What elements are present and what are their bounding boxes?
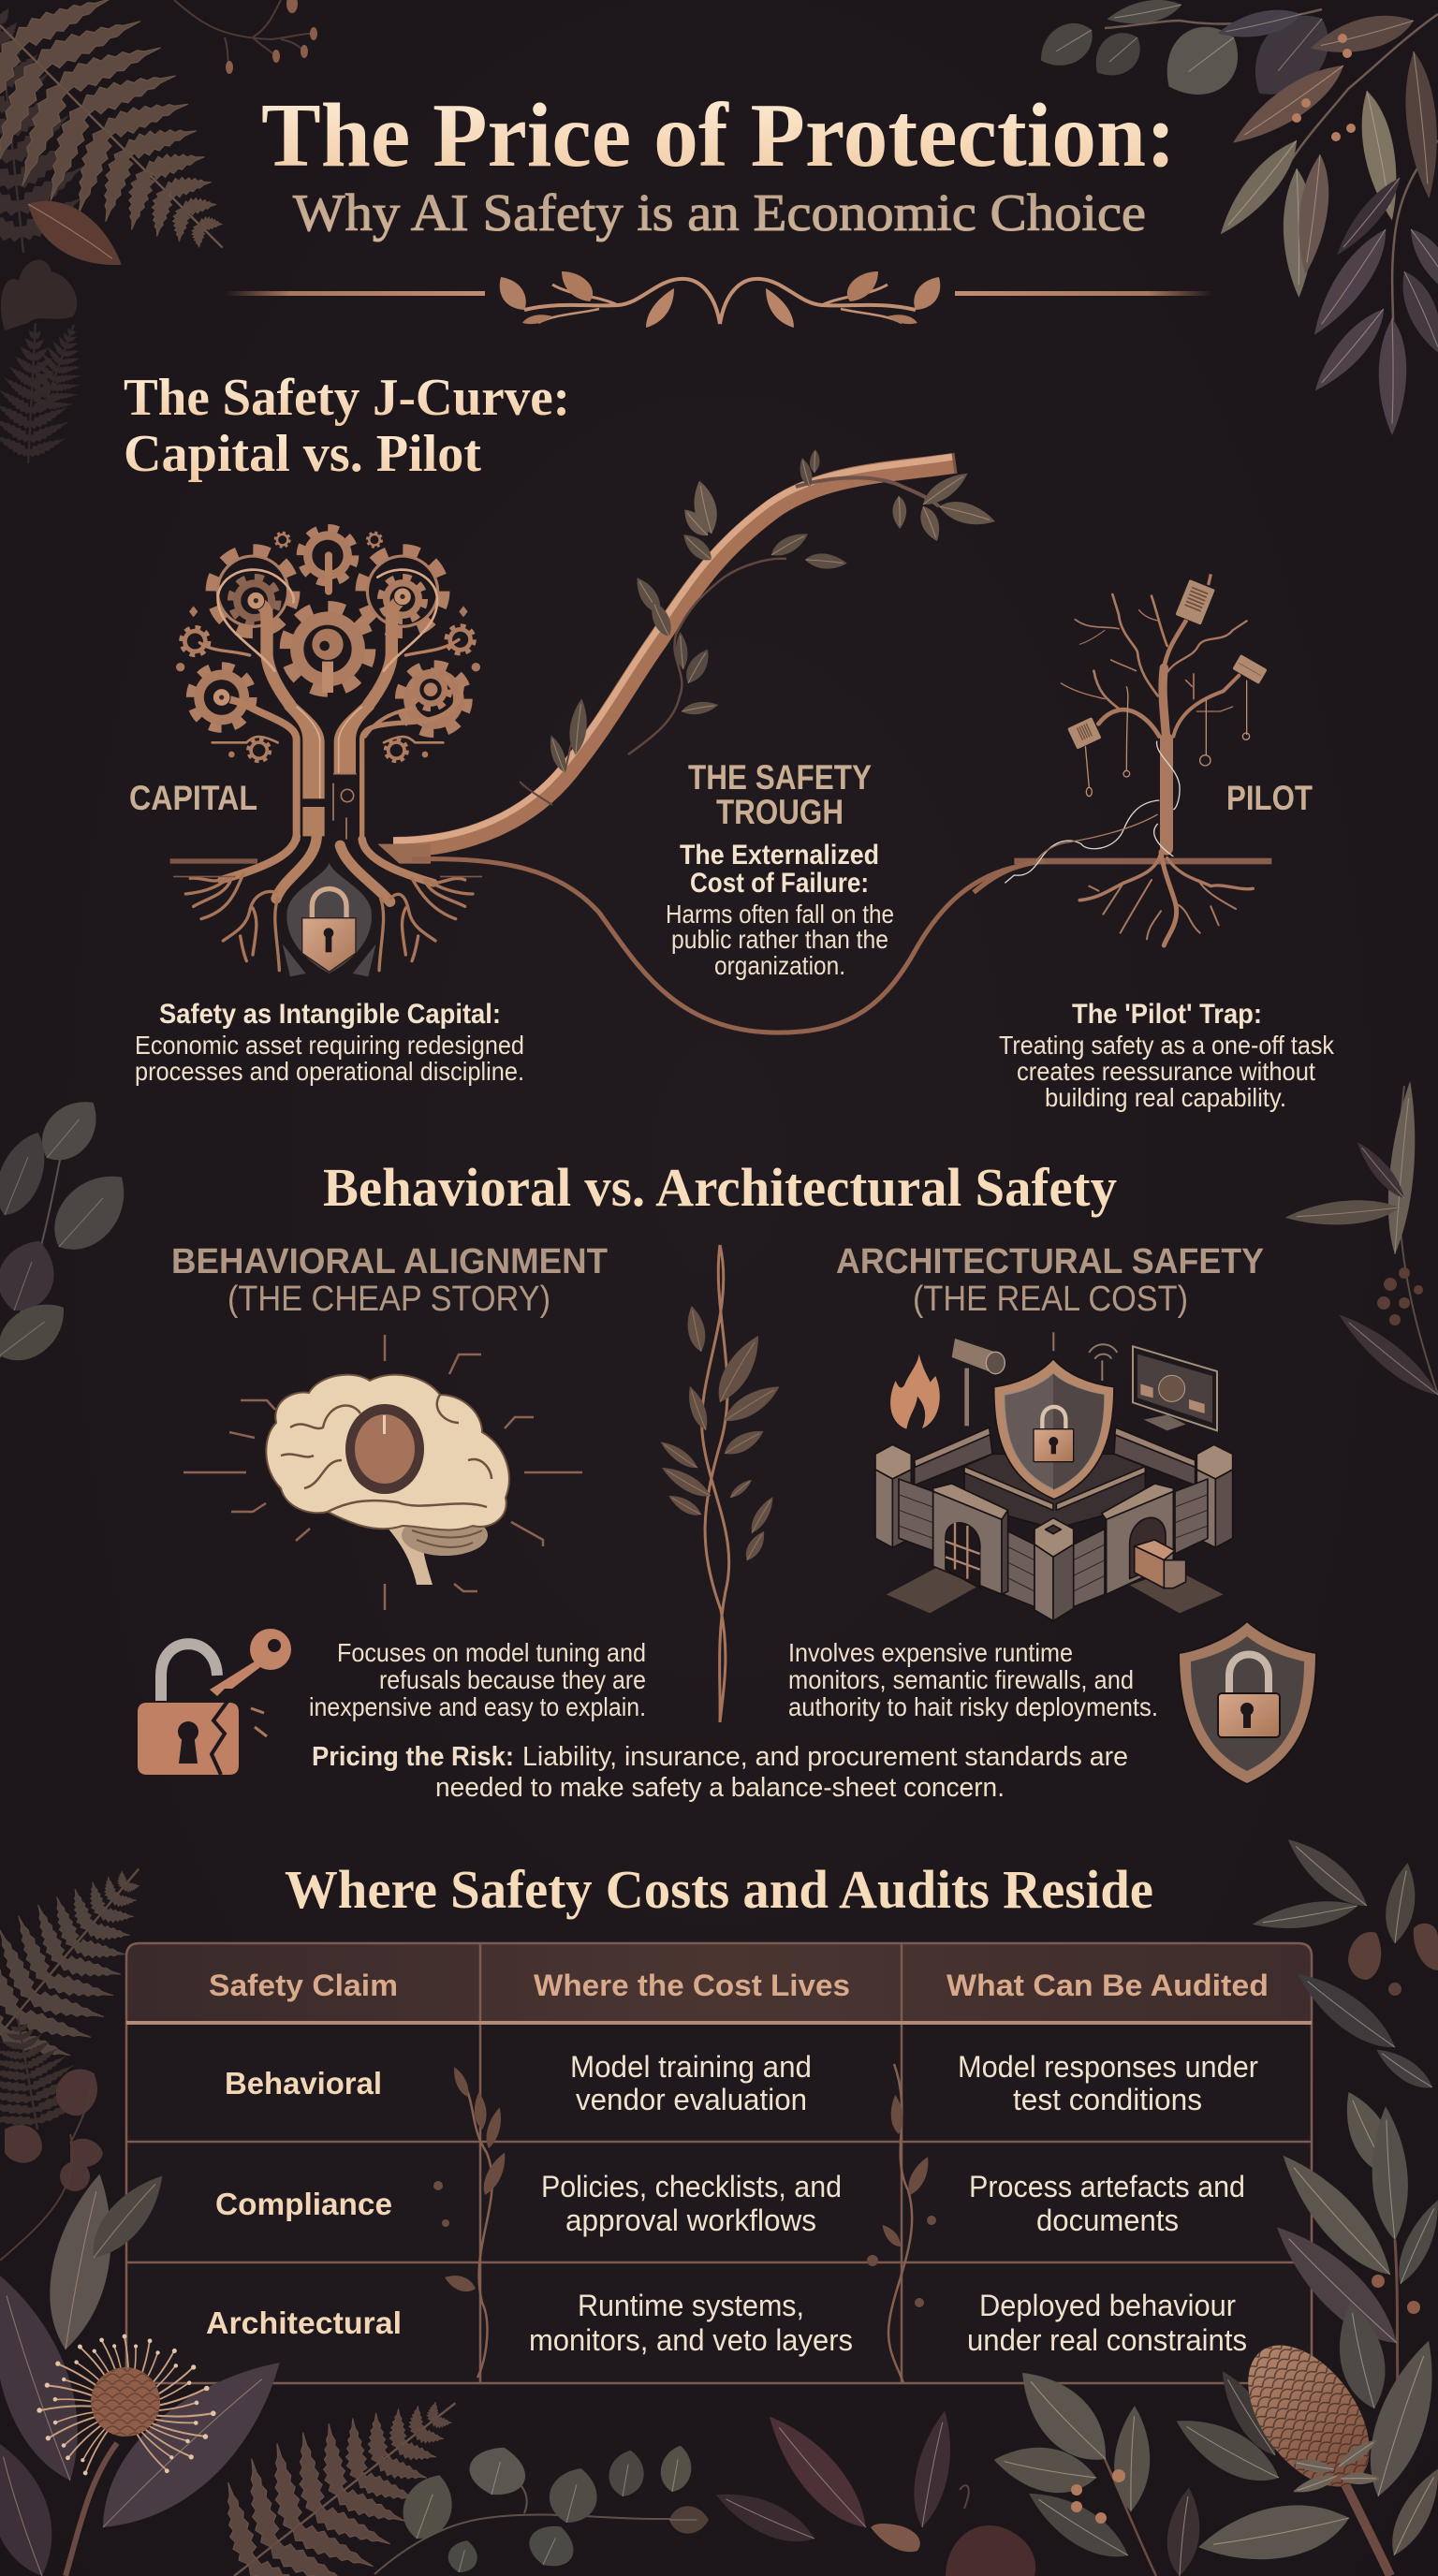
fern frond	[180, 2334, 510, 2576]
hanging strings	[1085, 681, 1250, 797]
gears	[182, 530, 474, 761]
table column: where the cost lives: approval workflows	[565, 2203, 816, 2237]
branches	[199, 555, 462, 840]
dark flower	[1, 260, 77, 330]
text: behavioral description: Focuses on model tuning and	[337, 1638, 646, 1667]
protea flower	[37, 2334, 216, 2476]
table column: where the cost lives: Runtime systems,	[578, 2289, 804, 2322]
table panel	[126, 1943, 1312, 2383]
gate blocks	[933, 1484, 1173, 1594]
twig with berries	[174, 0, 317, 74]
text: externalized cost of failure: organization.	[714, 951, 845, 980]
table header text: Where the Cost Lives	[534, 1969, 850, 2002]
text: the pilot trap: building real capability.	[1045, 1083, 1286, 1112]
trunk and roots	[185, 836, 473, 971]
trunk and branches	[1061, 594, 1247, 849]
table header text	[209, 1969, 1269, 2002]
table row labels: Behavioral	[225, 2066, 382, 2100]
column heading: behavioral alignment	[171, 1242, 608, 1319]
text: the pilot trap	[999, 999, 1335, 1112]
text: the pilot trap: The 'Pilot' Trap:	[1072, 999, 1262, 1030]
foliage: bottom center	[374, 2404, 1035, 2576]
text: externalized cost of failure: Cost of Failure:	[690, 868, 869, 899]
ground lines	[170, 858, 482, 877]
text: safety as intangible capital	[135, 999, 524, 1086]
text: behavioral description: inexpensive and easy to explain.	[309, 1692, 646, 1721]
trough curve	[412, 859, 1020, 1032]
branch leaves	[520, 449, 998, 805]
table column: what can be audited	[958, 2050, 1258, 2357]
table column: where the cost lives: monitors, and veto layers	[529, 2323, 853, 2357]
text: architectural description: authority to hait risky deployments.	[788, 1692, 1158, 1721]
crate in gate	[1135, 1540, 1186, 1588]
base of rising branch	[377, 844, 431, 864]
table column: what can be audited: Model responses under	[958, 2050, 1258, 2084]
column heading: architectural safety: (THE REAL COST)	[913, 1280, 1188, 1319]
table header text: What Can Be Audited	[946, 1969, 1269, 2002]
corner towers	[875, 1444, 1233, 1547]
wifi mast	[1053, 1332, 1117, 1381]
table column: where the cost lives	[529, 2050, 853, 2357]
table row labels: Architectural	[206, 2305, 402, 2340]
flame	[890, 1354, 940, 1429]
table header text: Safety Claim	[209, 1969, 398, 2002]
title ornament divider	[225, 271, 1212, 328]
large leaves	[0, 2264, 101, 2492]
table column: what can be audited: Process artefacts and	[969, 2170, 1245, 2203]
column heading: behavioral alignment: BEHAVIORAL ALIGNMENT	[171, 1242, 608, 1281]
column heading: behavioral alignment: (THE CHEAP STORY)	[227, 1280, 550, 1319]
capital tree with gears and lock	[170, 530, 482, 976]
table row labels	[206, 2066, 402, 2340]
j-curve rising branch	[393, 449, 998, 847]
central vine divider	[657, 1245, 785, 1722]
text: behavioral description: refusals because they are	[379, 1665, 646, 1694]
table column: where the cost lives: Model training and	[570, 2050, 812, 2084]
shield	[994, 1359, 1114, 1500]
text: externalized cost of failure	[666, 840, 894, 980]
roots	[1079, 852, 1253, 945]
brown leaf	[17, 185, 134, 283]
foliage: bottom right leaves and sprig	[990, 2323, 1394, 2576]
brick walls	[899, 1479, 1208, 1607]
vine: second column rule	[867, 2064, 936, 2383]
text: architectural description	[788, 1638, 1158, 1721]
foliage: lower left	[0, 1819, 510, 2576]
text: safety as intangible capital: Safety as Intangible Capital:	[159, 999, 501, 1030]
text: pricing the risk: Liability, insurance, and procurement standards are	[522, 1742, 1128, 1772]
trunk	[284, 702, 374, 836]
dial	[345, 1404, 424, 1494]
text: pricing the risk	[312, 1742, 1128, 1803]
icon: brain with dial	[183, 1335, 582, 1610]
monitor	[1133, 1346, 1217, 1430]
table column: what can be audited: under real constraints	[967, 2323, 1247, 2357]
subtitle: Why AI Safety is an Economic Choice	[293, 184, 1146, 242]
text: safety as intangible capital: Economic asset requiring redesigned	[135, 1031, 524, 1060]
vine: first column rule	[433, 2065, 511, 2378]
foliage: right side and banksia	[1251, 1829, 1438, 2561]
front tower	[1034, 1518, 1074, 1621]
lock	[283, 863, 376, 976]
wires	[1005, 741, 1180, 883]
title block	[261, 85, 1176, 242]
text: the pilot trap: Treating safety as a one-off task	[999, 1031, 1335, 1060]
table header background	[126, 1943, 1312, 2023]
icon: shield with padlock	[1179, 1621, 1316, 1784]
labels: capital, trough, pilot: CAPITAL	[129, 779, 257, 817]
section heading: safety j-curve	[124, 369, 570, 483]
text: pricing the risk: Pricing the Risk:	[312, 1742, 514, 1772]
foliage: top left	[0, 0, 317, 465]
title: The Price of Protection:	[261, 85, 1176, 186]
gear hubs	[213, 588, 411, 706]
banksia cone	[1224, 2323, 1394, 2509]
ground line	[1014, 858, 1271, 864]
pilot tree with tags and wires	[974, 574, 1271, 945]
labels: capital, trough, pilot: TROUGH	[716, 793, 844, 831]
table column: what can be audited: test conditions	[1013, 2083, 1202, 2116]
camera	[952, 1339, 1005, 1426]
ground ramps	[887, 1568, 1224, 1613]
text: externalized cost of failure: Harms often fall on the	[666, 900, 894, 929]
text: behavioral description	[309, 1638, 646, 1721]
text: externalized cost of failure: The Externalized	[680, 840, 879, 871]
labels: capital, trough, pilot: PILOT	[1226, 779, 1313, 817]
text: architectural description: Involves expensive runtime	[788, 1638, 1073, 1667]
section heading: where safety costs: Where Safety Costs and Audits Reside	[285, 1859, 1153, 1920]
section heading: safety j-curve: The Safety J-Curve:	[124, 369, 570, 427]
table column: where the cost lives: Policies, checklists, and	[541, 2170, 842, 2203]
center gear	[288, 610, 367, 693]
table column: what can be audited: documents	[1036, 2203, 1179, 2237]
section heading: safety j-curve: Capital vs. Pilot	[124, 425, 481, 483]
labels: capital, trough, pilot: THE SAFETY	[688, 758, 872, 797]
table row labels: Compliance	[215, 2187, 392, 2221]
table column: where the cost lives: vendor evaluation	[576, 2083, 807, 2116]
text: the pilot trap: creates reessurance without	[1017, 1057, 1315, 1086]
trunk bands	[302, 798, 326, 807]
text: externalized cost of failure: public rather than the	[671, 925, 888, 954]
text: safety as intangible capital: processes and operational discipline.	[135, 1057, 524, 1086]
column heading: architectural safety: ARCHITECTURAL SAFETY	[836, 1242, 1264, 1281]
rays	[183, 1335, 582, 1610]
text: pricing the risk: needed to make safety a balance-sheet concern.	[435, 1773, 1005, 1803]
fern fronds	[0, 0, 96, 260]
back walls	[915, 1427, 1196, 1529]
foliage: mid left	[0, 1088, 142, 1373]
icon: broken padlock and key	[138, 1629, 291, 1775]
labels: capital, trough, pilot	[129, 758, 1313, 831]
text: architectural description: monitors, semantic firewalls, and	[788, 1665, 1134, 1694]
icon: fortress with shield	[875, 1332, 1233, 1621]
dried flowers	[5, 2069, 103, 2191]
foliage: mid right	[1284, 1080, 1438, 1404]
foliage: top right	[1031, 0, 1438, 435]
section heading: behavioral vs architectural: Behavioral vs. Architectural Safety	[323, 1157, 1117, 1218]
table column: what can be audited: Deployed behaviour	[979, 2289, 1236, 2322]
column heading: architectural safety	[836, 1242, 1264, 1319]
tags	[1067, 574, 1268, 750]
